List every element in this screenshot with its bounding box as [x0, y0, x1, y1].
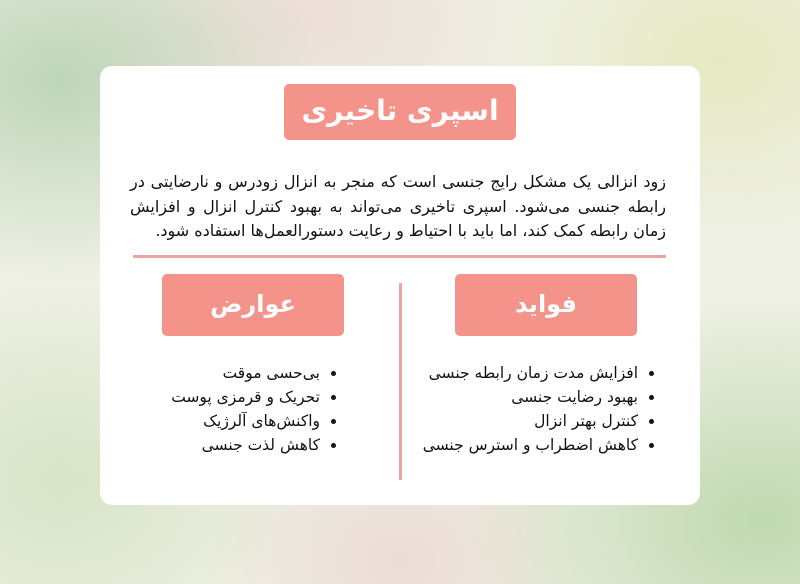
heading: benefits — [455, 274, 637, 336]
list: benefits: کاهش اضطراب و استرس جنسی — [423, 436, 638, 454]
heading: side effects — [162, 274, 344, 336]
list: side effects: بی‌حسی موقت — [223, 364, 320, 382]
card — [100, 66, 700, 505]
title — [284, 84, 516, 140]
intro paragraph: زود انزالی یک مشکل رایج جنسی است که منجر به انزال زودرس و نارضایتی در رابطه جنسی می‌شود. اسپری تاخیری می‌تواند به بهبود کنترل انزال و افزایش زمان رابطه کمک کند، اما باید با احتیاط و رعایت دستورالعمل‌ها استفاده شود. — [130, 172, 666, 240]
list: benefits: کنترل بهتر انزال — [534, 412, 638, 430]
list: side effects: تحریک و قرمزی پوست — [171, 388, 320, 406]
list: side effects — [171, 364, 336, 454]
heading: benefits: فواید — [515, 290, 577, 318]
title: اسپری تاخیری — [301, 94, 499, 127]
list: benefits: بهبود رضایت جنسی — [511, 388, 638, 406]
list: benefits — [423, 364, 654, 454]
list: benefits: افزایش مدت زمان رابطه جنسی — [429, 364, 638, 382]
list: side effects: واکنش‌های آلرژیک — [203, 412, 320, 430]
heading: side effects: عوارض — [210, 290, 296, 318]
list: side effects: کاهش لذت جنسی — [202, 436, 320, 454]
